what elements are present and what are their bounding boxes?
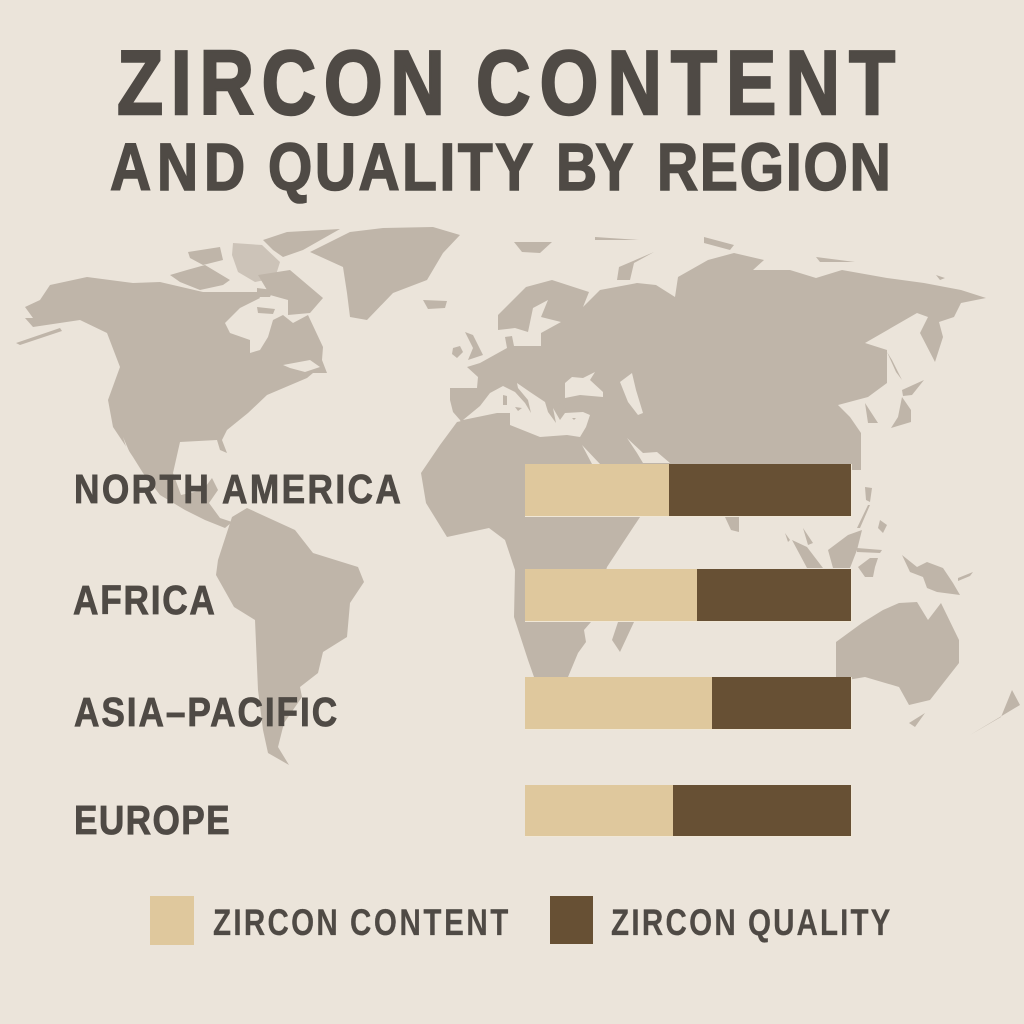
- label: Africa: AFRICA: [73, 578, 215, 624]
- world map: [16, 227, 1020, 765]
- map: Tasmania and New Zealand: [909, 690, 1020, 735]
- map: Arctic islands: [170, 229, 340, 315]
- bar: North America: [525, 464, 852, 517]
- label: Europe: EUROPE: [74, 798, 230, 844]
- legend: zircon content: CONTENT: [350, 903, 509, 944]
- label: Asia-Pacific: ASIA–PACIFIC: [74, 690, 337, 736]
- bar: Asia-Pacific: [525, 677, 852, 730]
- map: South America: [216, 508, 364, 765]
- title: [110, 31, 895, 205]
- title: REGION: [657, 131, 891, 205]
- title: CONTENT: [476, 31, 895, 134]
- bar: Europe: [525, 785, 852, 837]
- legend: zircon content: ZIRCON: [213, 903, 338, 944]
- map: Arctic archipelago: [232, 243, 280, 282]
- map: British Isles: [452, 332, 483, 360]
- legend: zircon quality: [550, 896, 890, 944]
- title: AND: [110, 131, 245, 205]
- map: Mediterranean islands: [503, 395, 576, 420]
- map: Africa: [421, 413, 640, 677]
- legend: zircon quality: ZIRCON: [611, 903, 736, 944]
- map: North America: [25, 277, 327, 528]
- map: Southeast Asia islands: [725, 487, 973, 595]
- map: Arctic Eurasia islands: [514, 237, 945, 280]
- map: Eurasia: [450, 253, 986, 470]
- legend: zircon quality: QUALITY: [748, 903, 890, 944]
- bar: Africa: [525, 569, 852, 622]
- map: Alaska tail: [16, 328, 62, 345]
- title: ZIRCON: [117, 31, 445, 134]
- label: North America: NORTH AMERICA: [74, 467, 401, 513]
- title: QUALITY: [268, 131, 533, 205]
- title: BY: [556, 131, 633, 205]
- map: continents: [25, 253, 986, 765]
- map: Greenland: [310, 227, 460, 320]
- legend: zircon content: [150, 896, 509, 945]
- map: Sakhalin and Japan: [887, 352, 924, 428]
- map: Korea: [865, 403, 878, 423]
- map: Australia: [836, 602, 959, 705]
- map: seas cut from land: [123, 360, 670, 464]
- map: Madagascar: [612, 622, 634, 652]
- map: Iceland: [423, 300, 447, 309]
